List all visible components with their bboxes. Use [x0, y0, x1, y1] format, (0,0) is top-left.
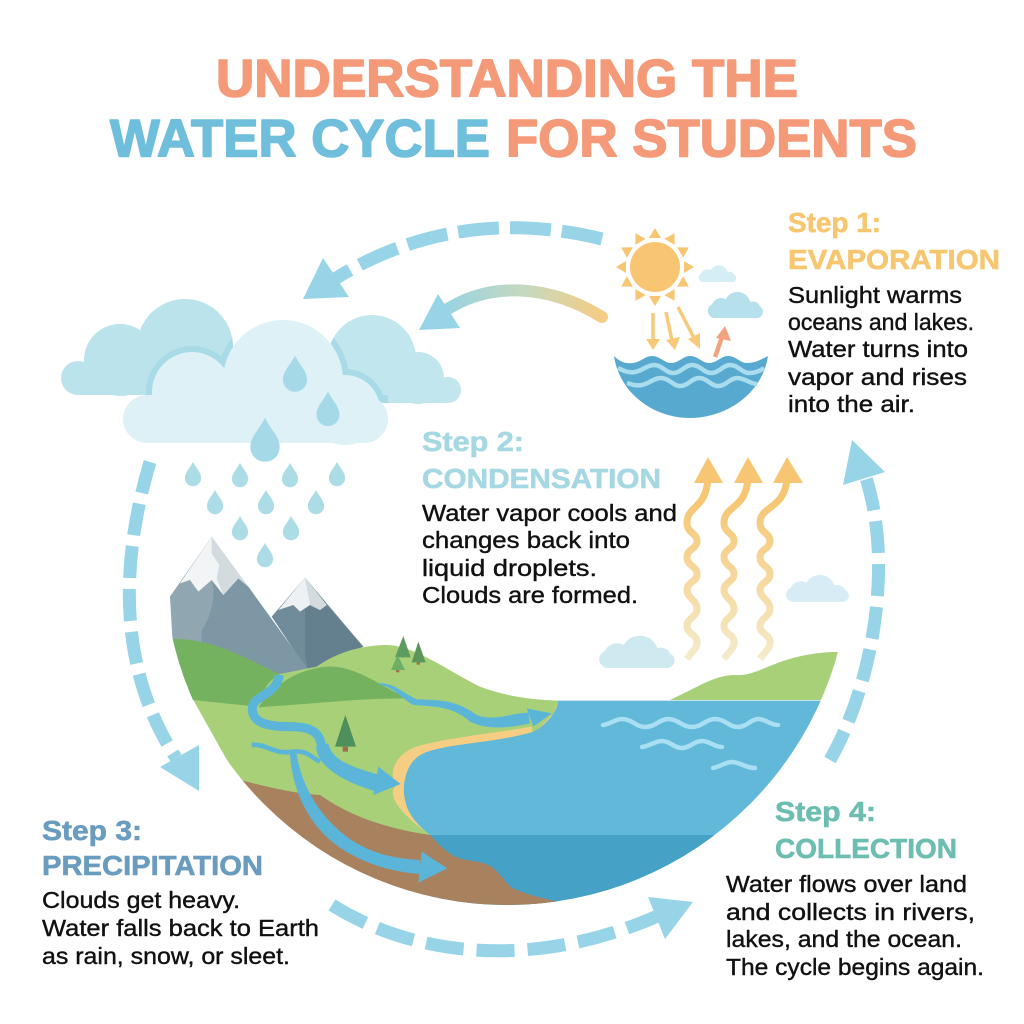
heading: step 1: Step 1: [788, 207, 881, 238]
cloud drops [250, 356, 339, 462]
icon: orange vapor arrow [715, 326, 731, 357]
icon: sunlight arrows [646, 307, 700, 350]
title: FOR STUDENTS [506, 110, 917, 168]
soil [242, 780, 557, 905]
title: WATER CYCLE [110, 110, 490, 168]
ocean upper [404, 700, 821, 905]
text: step 4 body: lakes, and the ocean. [726, 926, 962, 952]
heading: step 4 [775, 796, 957, 864]
title [110, 50, 917, 168]
panel: step 2 condensation [422, 426, 677, 608]
icon: larger cloud near sun [708, 292, 763, 318]
text: step 4 body: The cycle begins again. [726, 954, 984, 980]
panel: step 3 precipitation [42, 815, 319, 969]
heading: step 3: Step 3: [42, 815, 142, 846]
title: UNDERSTANDING THE [216, 50, 798, 108]
panel: step 4 collection [726, 796, 984, 980]
icon: large rain cloud group [61, 299, 461, 462]
back right cloud [328, 315, 461, 404]
text: step 3 body: as rain, snow, or sleet. [42, 943, 290, 969]
icon: small cloud near sun [699, 265, 736, 282]
text: step 4 body: Water flows over land [726, 871, 967, 897]
heading: step 3 [42, 815, 263, 881]
heading: step 4: COLLECTION [775, 833, 957, 864]
dark hills [160, 639, 407, 707]
ocean lower [430, 835, 714, 905]
arrow: dashed left arc downward [129, 462, 199, 791]
trees [335, 636, 426, 752]
right hill [670, 652, 838, 700]
icon: cloud left of vapor [599, 636, 675, 668]
arrow: dashed right arc upward [830, 440, 885, 760]
heading: step 1 [788, 207, 1000, 275]
heading: step 2: CONDENSATION [422, 463, 661, 494]
text: step 2 body: Water vapor cools and [422, 500, 677, 526]
text: step 1 body: Water turns into [788, 336, 968, 362]
text: step 3 body [42, 887, 319, 969]
panel: step 1 evaporation [788, 207, 1000, 417]
mountains [170, 537, 363, 683]
arrow: dashed top arc toward cloud [303, 228, 602, 299]
landscape [170, 536, 838, 905]
heading: step 3: PRECIPITATION [42, 850, 263, 881]
land [182, 645, 558, 835]
icon: water bowl with waves [614, 356, 768, 418]
text: step 1 body: oceans and lakes. [788, 309, 974, 335]
text: step 1 body [788, 282, 974, 417]
text: step 1 body: vapor and rises [788, 364, 967, 390]
text: step 3 body: Clouds get heavy. [42, 887, 240, 913]
text: step 2 body: changes back into [422, 527, 630, 553]
heading: step 4: Step 4: [775, 796, 876, 827]
icon: rising vapor wavy arrows [687, 457, 803, 659]
front cloud [123, 320, 388, 445]
icon: falling rain drops [185, 462, 345, 567]
text: step 2 body [422, 500, 677, 608]
back left cloud [61, 299, 235, 396]
cloud shadow [123, 338, 389, 403]
heading: step 2: Step 2: [422, 426, 524, 457]
heading: step 1: EVAPORATION [788, 244, 1000, 275]
icon: sun [616, 228, 694, 306]
text: step 2 body: Clouds are formed. [422, 582, 638, 608]
arrow: dashed bottom arc [332, 897, 693, 951]
rivers [252, 675, 552, 883]
arrow: curved from sun to cloud [419, 290, 602, 330]
waves on ocean [603, 719, 778, 768]
text: step 1 body: into the air. [788, 391, 915, 417]
text: step 4 body [726, 871, 984, 980]
text: step 4 body: and collects in rivers, [726, 899, 975, 925]
text: step 1 body: Sunlight warms [788, 282, 962, 308]
sand [393, 701, 558, 835]
icon: cloud right of vapor [786, 575, 849, 602]
text: step 2 body: liquid droplets. [422, 555, 597, 581]
heading: step 2 [422, 426, 661, 494]
text: step 3 body: Water falls back to Earth [42, 915, 319, 941]
